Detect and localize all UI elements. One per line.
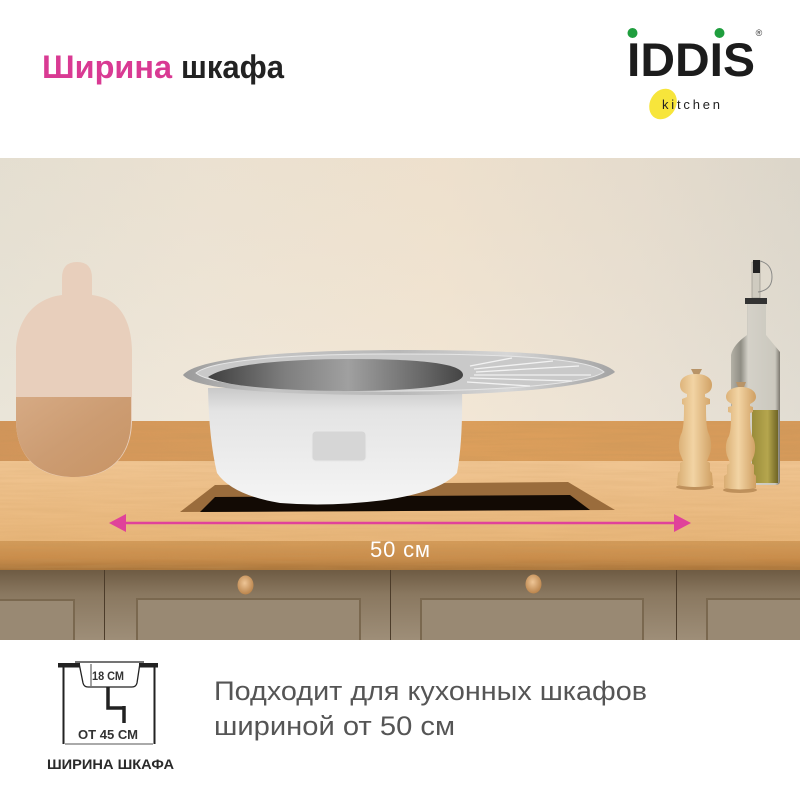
sink [183,350,615,504]
photo: kitchen scene [0,158,800,660]
description: шириной от 50 см [214,711,455,741]
overflow plate [312,431,366,461]
counter cut-out [180,482,615,512]
depth label: 18 СМ [92,671,124,683]
oil bottle [731,260,780,485]
countertop and cabinet outline [58,663,158,744]
siphon [108,687,124,723]
sink rim [183,350,615,395]
pepper mill small [723,382,757,493]
wall [0,158,800,422]
title: шкафа [181,49,284,85]
title: Ширина [42,49,172,85]
width arrow [109,514,691,532]
cabinets [0,570,800,640]
countertop surface [0,461,800,541]
width label: ОТ 45 СМ [78,728,138,742]
width dimension [65,743,153,745]
countertop back [0,421,800,462]
logo: IDDIS kitchen [627,28,763,124]
sink diagram [58,662,158,744]
cabinet knob right [526,574,542,594]
sink body [208,388,462,504]
diagram caption: ШИРИНА ШКАФА [47,756,174,772]
bowl outline [75,662,144,687]
drainboard ribs [467,358,591,386]
pepper mill large [676,369,714,490]
logo: IDDIS kitchen: IDDIS [627,33,755,86]
cabinet knob left [238,576,254,594]
cutting board [16,262,132,477]
description [214,676,647,741]
title [42,49,284,85]
countertop front edge [0,541,800,570]
logo: IDDIS kitchen: kitchen [662,97,720,112]
description: Подходит для кухонных шкафов [214,676,647,706]
sink bowl [208,359,463,391]
logo: IDDIS kitchen: ® [756,28,763,38]
depth dimension [90,664,92,686]
width label: 50 см [370,537,430,562]
